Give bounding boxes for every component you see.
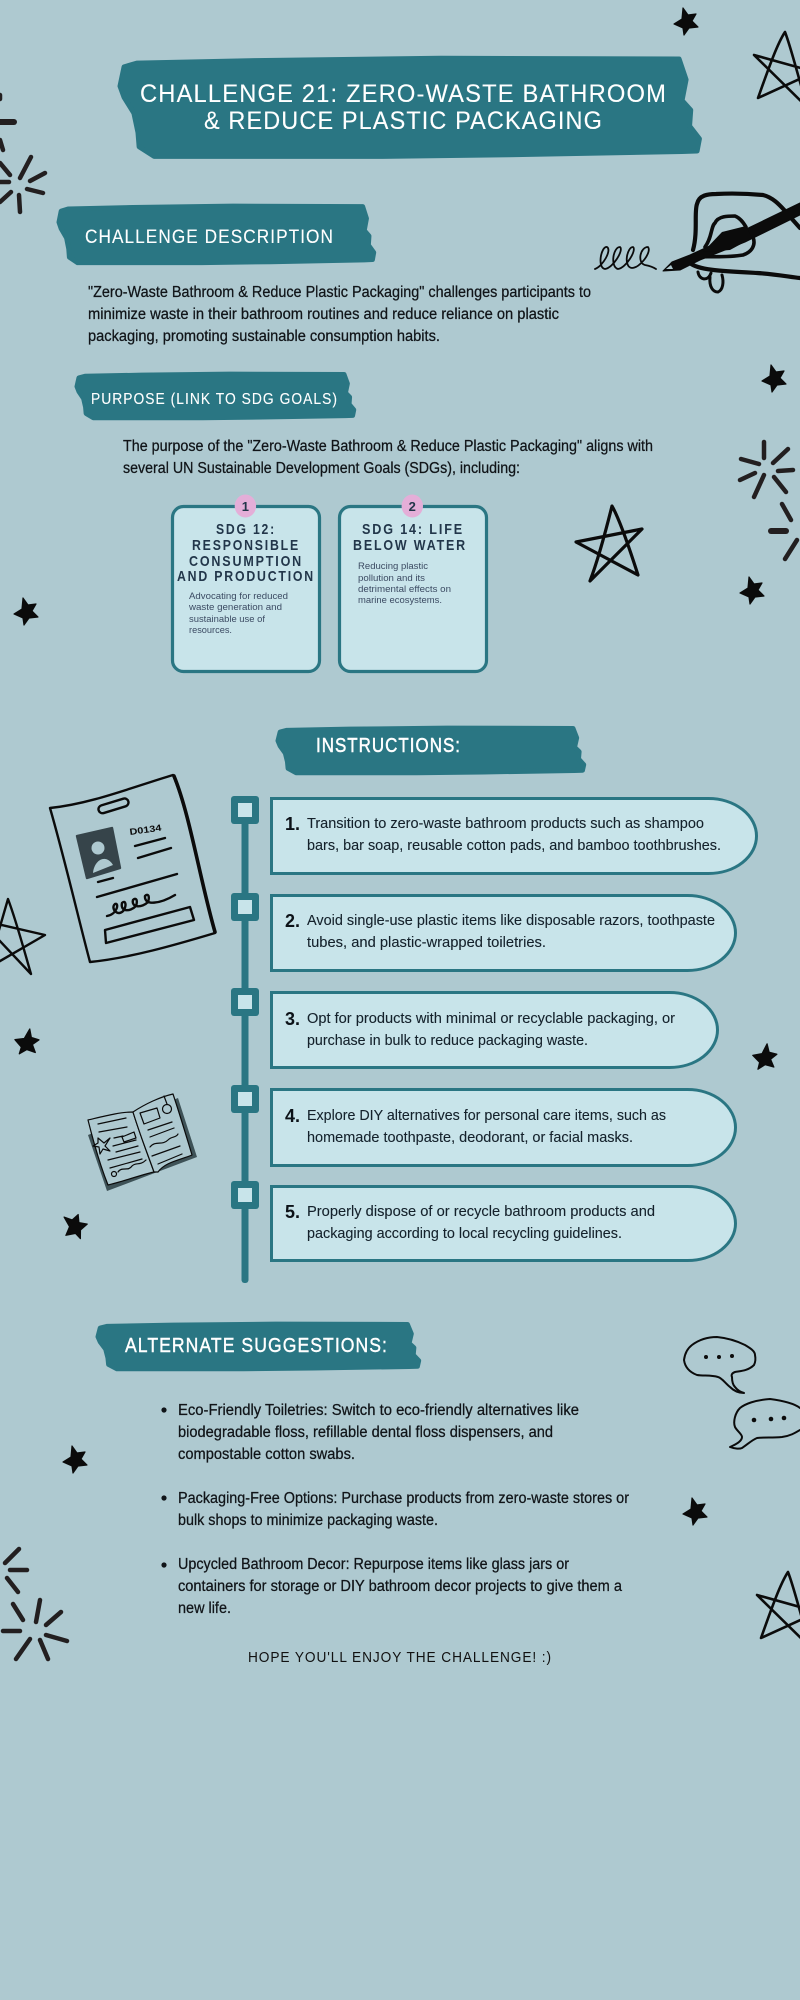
text block: challenge description: packaging, promoting sustainable consumption habits.: [88, 328, 440, 345]
text block: challenge description: "Zero-Waste Bathroom & Reduce Plastic Packaging" challenges participants to: [88, 284, 591, 301]
step 2: [272, 896, 736, 970]
icon: outline star bottom right: [757, 1572, 800, 1648]
icon: small star 7: [749, 1040, 781, 1074]
icon: small star 6: [57, 1208, 92, 1244]
title banner: [120, 58, 699, 156]
icon: small star 1: [674, 8, 698, 35]
card heading: RESPONSIBLE: [192, 537, 300, 554]
heading: instructions: INSTRUCTIONS:: [316, 735, 461, 757]
icon: sparkle burst top left: [0, 95, 45, 212]
title text: [140, 80, 667, 135]
card heading: SDG 14: LIFE: [362, 521, 464, 538]
step 2: 2.: [285, 910, 300, 931]
list: alternate suggestions: new life.: [178, 1600, 231, 1617]
heading: challenge description: [59, 206, 374, 263]
step 1: [272, 798, 756, 874]
icon: open book: [88, 1094, 197, 1191]
list: alternate suggestions: bulk shops to minimize packaging waste.: [178, 1512, 438, 1529]
icon: speech bubble 2: [730, 1399, 800, 1449]
step 4: Explore DIY alternatives for personal care items, such as: [307, 1107, 666, 1124]
card text: [188, 591, 288, 636]
step 1: bars, bar soap, reusable cotton pads, and bamboo toothbrushes.: [307, 837, 721, 854]
list: alternate suggestions: [161, 1402, 629, 1617]
icon: small star 2: [762, 365, 786, 392]
step 3: [272, 992, 718, 1068]
icon: small star 5: [10, 1025, 43, 1060]
timeline: [231, 796, 259, 1283]
card text: waste generation and: [188, 602, 282, 613]
icon: hand writing with pen: [663, 194, 800, 292]
list: alternate suggestions: containers for storage or DIY bathroom decor projects to give them a: [178, 1578, 622, 1595]
text block: purpose: [123, 438, 653, 477]
card text: pollution and its: [358, 573, 425, 584]
icon: sparkle burst right: [740, 442, 797, 559]
text block: purpose: The purpose of the "Zero-Waste Bathroom & Reduce Plastic Packaging" aligns with: [123, 438, 653, 455]
card text: resources.: [189, 625, 232, 636]
card text: sustainable use of: [189, 614, 265, 625]
heading: purpose: PURPOSE (LINK TO SDG GOALS): [91, 391, 338, 408]
step 5: 5.: [285, 1201, 300, 1222]
badge 1: 1: [242, 499, 249, 514]
icon: outline star middle: [576, 506, 642, 581]
card text: Reducing plastic: [358, 561, 428, 572]
card: SDG 14: [340, 494, 486, 672]
card heading: BELOW WATER: [353, 537, 467, 554]
icon: outline star top right: [754, 32, 800, 108]
icon: small star 9: [683, 1498, 707, 1525]
closing message: HOPE YOU'LL ENJOY THE CHALLENGE! :): [248, 1649, 552, 1666]
icon: small star 4: [14, 598, 38, 625]
list: alternate suggestions: Eco-Friendly Toiletries: Switch to eco-friendly alternatives like: [178, 1402, 579, 1419]
title text: & REDUCE PLASTIC PACKAGING: [204, 107, 603, 135]
step 4: [272, 1090, 736, 1166]
icon: small star 3: [740, 577, 764, 604]
badge 1: [235, 494, 256, 518]
step 4: homemade toothpaste, deodorant, or facial masks.: [307, 1129, 633, 1146]
list: alternate suggestions: compostable cotton swabs.: [178, 1446, 355, 1463]
step 1: 1.: [285, 813, 300, 834]
list: alternate suggestions: biodegradable floss, refillable dental floss dispensers, and: [178, 1424, 553, 1441]
heading: instructions: [278, 728, 584, 773]
step 3: 3.: [285, 1008, 300, 1029]
card text: detrimental effects on: [358, 584, 451, 595]
badge 2: 2: [409, 499, 416, 514]
icon: small star 8: [63, 1446, 87, 1473]
title text: CHALLENGE 21: ZERO-WASTE BATHROOM: [140, 80, 667, 108]
card: SDG 12: [172, 494, 320, 672]
list: alternate suggestions: Upcycled Bathroom Decor: Repurpose items like glass jars or: [178, 1556, 569, 1573]
card heading: [177, 521, 315, 585]
icon: ID badge: [50, 775, 215, 962]
icon: speech bubble 1: [684, 1337, 755, 1393]
card heading: SDG 12:: [216, 521, 276, 538]
text block: challenge description: [88, 284, 591, 345]
icon: ID badge: D0134: [129, 823, 162, 837]
card text: marine ecosystems.: [358, 595, 442, 606]
step 5: Properly dispose of or recycle bathroom products and: [307, 1203, 655, 1220]
icon: outline star left: [0, 899, 45, 974]
step 3: Opt for products with minimal or recyclable packaging, or: [307, 1010, 675, 1027]
step 5: [272, 1186, 736, 1260]
step 3: purchase in bulk to reduce packaging waste.: [307, 1032, 588, 1049]
icon: pen scribble: [595, 247, 656, 269]
card heading: AND PRODUCTION: [177, 568, 315, 585]
text block: challenge description: minimize waste in their bathroom routines and reduce reliance on plastic: [88, 306, 559, 323]
badge 2: [402, 494, 423, 518]
card heading: [353, 521, 467, 554]
card text: [358, 561, 451, 606]
list: alternate suggestions: Packaging-Free Options: Purchase products from zero-waste stores or: [178, 1490, 629, 1507]
heading: alternate suggestions: ALTERNATE SUGGESTIONS:: [125, 1335, 388, 1357]
heading: challenge description: CHALLENGE DESCRIPTION: [85, 226, 334, 248]
step 2: tubes, and plastic-wrapped toiletries.: [307, 934, 546, 951]
card text: Advocating for reduced: [189, 591, 288, 602]
heading: alternate suggestions: [98, 1324, 419, 1369]
text block: purpose: several UN Sustainable Development Goals (SDGs), including:: [123, 460, 520, 477]
step 2: Avoid single-use plastic items like disposable razors, toothpaste: [307, 912, 715, 929]
step 1: Transition to zero-waste bathroom products such as shampoo: [307, 815, 704, 832]
card heading: CONSUMPTION: [189, 553, 303, 570]
step 4: 4.: [285, 1105, 300, 1126]
heading: purpose: [77, 374, 354, 418]
icon: sparkle burst bottom left: [3, 1549, 67, 1659]
step 5: packaging according to local recycling guidelines.: [307, 1225, 622, 1242]
